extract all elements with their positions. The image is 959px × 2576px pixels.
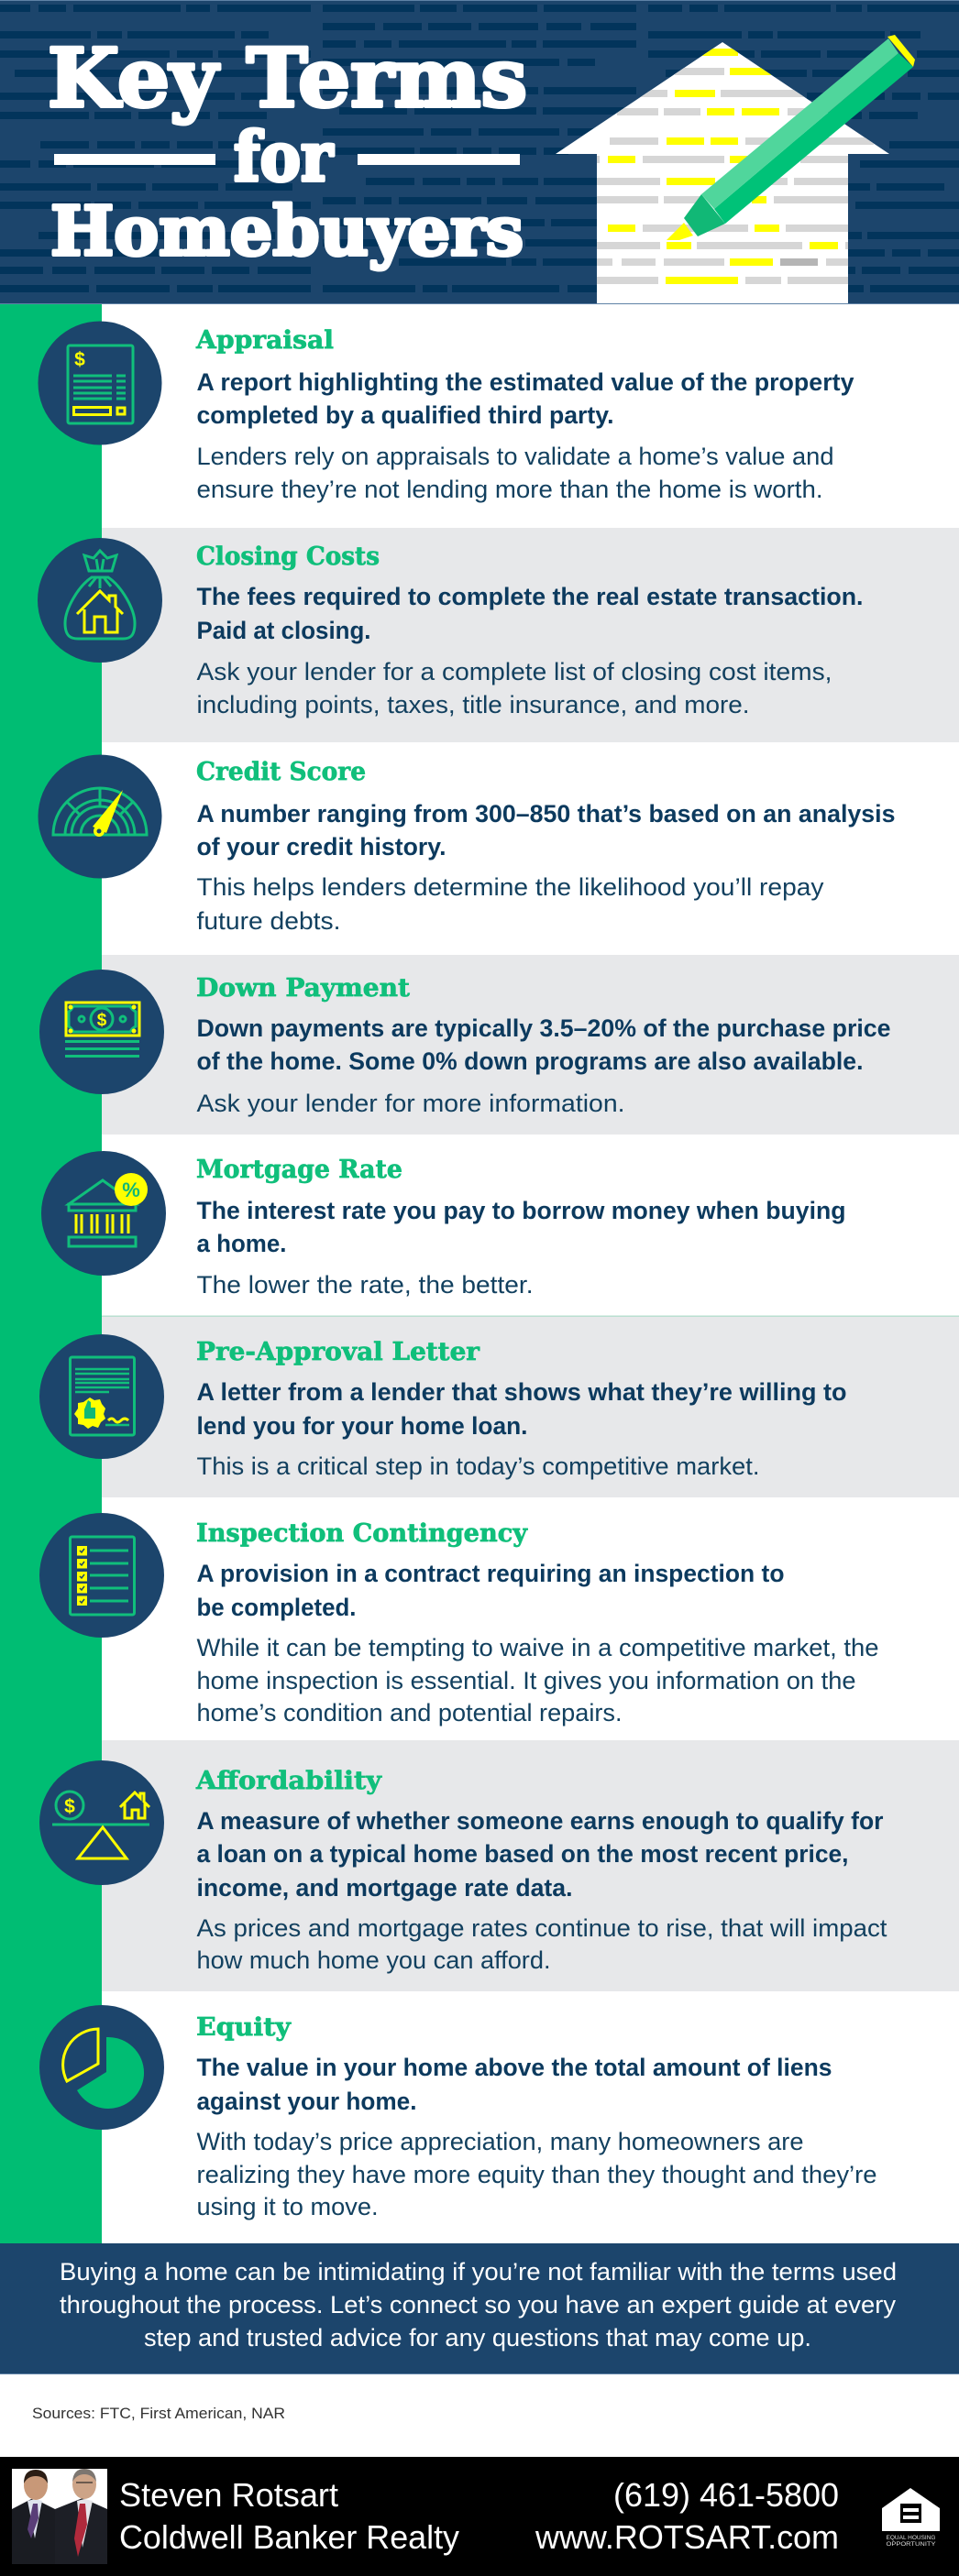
- icon: credit gauge: [39, 755, 161, 878]
- icon: checklist: [39, 1513, 164, 1638]
- definition: [196, 1197, 845, 1257]
- definition: [196, 1560, 785, 1621]
- icon: balance of coin and house: [39, 1760, 164, 1885]
- house illustration: [556, 42, 889, 303]
- heading: Down Payment: [196, 974, 411, 1003]
- detail text: Ask your lender for more information.: [196, 1090, 625, 1117]
- green sidebar: [0, 304, 102, 2243]
- panel: Down Payment: [39, 970, 890, 1117]
- closing message: throughout the process. Let’s connect so you have an expert guide at every: [60, 2291, 897, 2318]
- detail text: The lower the rate, the better.: [196, 1271, 534, 1299]
- definition: A report highlighting the estimated value of the property: [196, 368, 854, 396]
- heading: Equity: [196, 2013, 292, 2042]
- definition: [196, 1014, 890, 1075]
- panel: Pre-Approval Letter: [39, 1334, 847, 1480]
- detail text: [196, 658, 832, 718]
- heading: Appraisal: [195, 326, 334, 355]
- icon: appraisal report: [39, 321, 161, 445]
- definition: of your credit history.: [196, 833, 446, 860]
- row backgrounds: [102, 528, 959, 1991]
- detail text: home inspection is essential. It gives you information on the: [196, 1667, 856, 1694]
- icon: balance of coin and house: $: [64, 1796, 75, 1817]
- closing message: [60, 2258, 897, 2351]
- definition: [196, 583, 864, 644]
- icon: pie chart: [39, 2005, 164, 2130]
- detail text: Lenders rely on appraisals to validate a home’s value and: [196, 443, 834, 470]
- sources: Sources: FTC, First American, NAR: [32, 2405, 285, 2422]
- definition: A measure of whether someone earns enough to qualify for: [196, 1807, 883, 1835]
- agent photo: [12, 2469, 107, 2564]
- definition: The fees required to complete the real estate transaction.: [196, 583, 864, 610]
- header background: [0, 0, 959, 304]
- icon: equal housing opportunity: [882, 2488, 940, 2548]
- icon: bank with percent badge: %: [122, 1178, 140, 1201]
- definition: [196, 1807, 883, 1902]
- definition: [196, 1378, 847, 1440]
- detail text: Ask your lender for a complete list of closing cost items,: [196, 658, 832, 685]
- contact details: (619) 461-5800: [613, 2476, 839, 2514]
- detail text: [196, 2128, 876, 2220]
- icon: equal housing opportunity: OPPORTUNITY: [886, 2541, 936, 2548]
- heading: Mortgage Rate: [196, 1156, 402, 1184]
- heading: Closing Costs: [196, 543, 380, 571]
- detail text: [196, 1634, 878, 1726]
- closing call to action band: [0, 2243, 959, 2373]
- icon: approval letter: [39, 1334, 164, 1459]
- definition: [196, 800, 895, 860]
- heading: Credit Score: [196, 758, 366, 786]
- icon: money bag with house: [38, 538, 162, 663]
- definition: a home.: [196, 1230, 286, 1257]
- panel: Closing Costs: [38, 538, 864, 718]
- detail text: This helps lenders determine the likelihood you’ll repay: [196, 873, 824, 901]
- icon: cash stack: [39, 970, 164, 1094]
- definition: of the home. Some 0% down programs are also available.: [196, 1047, 864, 1075]
- icon: appraisal report: $: [74, 349, 85, 370]
- detail text: While it can be tempting to waive in a competitive market, the: [196, 1634, 878, 1661]
- closing message: Buying a home can be intimidating if you’re not familiar with the terms used: [60, 2258, 897, 2286]
- agent name and company: [119, 2476, 459, 2556]
- definition: [196, 2054, 832, 2115]
- title: [48, 30, 527, 271]
- detail text: using it to move.: [196, 2193, 378, 2220]
- title: Homebuyers: [50, 192, 524, 271]
- definition: completed by a qualified third party.: [196, 401, 614, 429]
- panel: Affordability: [39, 1760, 887, 1974]
- heading: Affordability: [195, 1767, 382, 1795]
- detail text: future debts.: [196, 907, 341, 935]
- definition: [196, 368, 854, 429]
- contact details: [535, 2476, 839, 2556]
- detail text: [196, 443, 834, 503]
- header banner: [0, 0, 959, 304]
- heading: Inspection Contingency: [196, 1519, 528, 1548]
- heading: Pre-Approval Letter: [196, 1338, 480, 1366]
- definition: Down payments are typically 3.5–20% of the purchase price: [196, 1014, 890, 1042]
- panel: Equity: [39, 2005, 876, 2220]
- panel: Inspection Contingency: [39, 1513, 878, 1726]
- title: Key Terms: [48, 30, 527, 126]
- footer bar: [0, 2457, 959, 2576]
- definition: The interest rate you pay to borrow money when buying: [196, 1197, 845, 1224]
- detail text: how much home you can afford.: [196, 1946, 550, 1974]
- definition: Paid at closing.: [196, 617, 370, 644]
- definition: A provision in a contract requiring an inspection to: [196, 1560, 785, 1587]
- panel: Credit Score: [39, 755, 895, 935]
- agent name and company: Coldwell Banker Realty: [119, 2518, 459, 2556]
- detail text: As prices and mortgage rates continue to rise, that will impact: [196, 1914, 887, 1942]
- definition: against your home.: [196, 2088, 416, 2115]
- definition: a loan on a typical home based on the most recent price,: [196, 1840, 849, 1868]
- detail text: ensure they’re not lending more than the home is worth.: [196, 476, 822, 503]
- definition: income, and mortgage rate data.: [196, 1874, 572, 1902]
- detail text: This is a critical step in today’s competitive market.: [196, 1452, 759, 1480]
- closing message: step and trusted advice for any questions that may come up.: [144, 2324, 811, 2351]
- detail text: realizing they have more equity than they thought and they’re: [196, 2161, 876, 2188]
- definition: A letter from a lender that shows what they’re willing to: [196, 1378, 847, 1406]
- detail text: [196, 873, 824, 935]
- panel: Appraisal: [39, 321, 854, 503]
- agent name and company: Steven Rotsart: [119, 2476, 338, 2514]
- icon: highlighter pen: [667, 35, 915, 240]
- definition: A number ranging from 300–850 that’s based on an analysis: [196, 800, 895, 828]
- title: for: [234, 118, 334, 197]
- definition: be completed.: [196, 1594, 356, 1621]
- icon: equal housing opportunity: EQUAL HOUSING: [886, 2535, 935, 2541]
- contact details: www.ROTSART.com: [535, 2518, 839, 2556]
- definition: lend you for your home loan.: [196, 1412, 528, 1440]
- definition: The value in your home above the total amount of liens: [196, 2054, 832, 2081]
- detail text: including points, taxes, title insurance, and more.: [196, 691, 750, 718]
- icon: bank with percent badge: [41, 1151, 166, 1276]
- detail text: [196, 1914, 887, 1974]
- icon: cash stack: $: [97, 1011, 107, 1030]
- detail text: With today’s price appreciation, many homeowners are: [196, 2128, 803, 2155]
- panel: Mortgage Rate: [41, 1151, 845, 1299]
- detail text: home’s condition and potential repairs.: [196, 1699, 622, 1726]
